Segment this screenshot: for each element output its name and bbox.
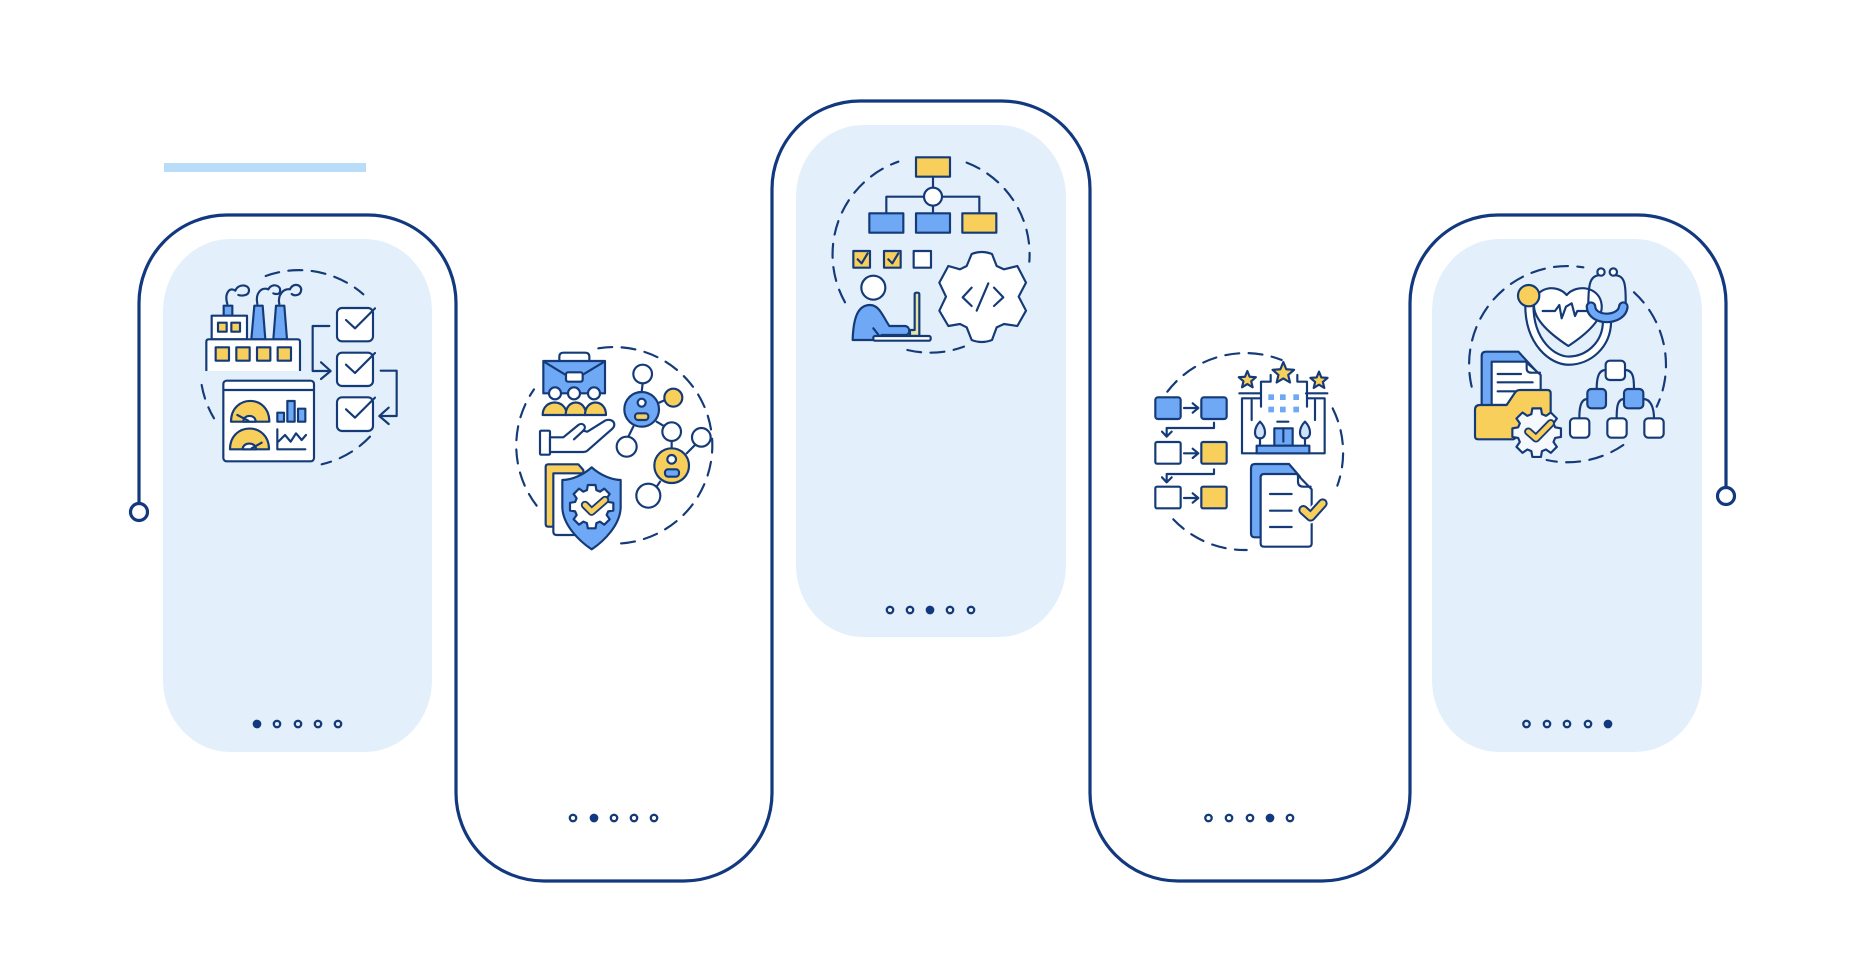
- card: panel 3 background: [796, 125, 1066, 637]
- icon: factory monitoring with checklist: [202, 270, 397, 464]
- end node right: [1718, 488, 1734, 504]
- connector outline snake: [139, 101, 1726, 881]
- pagination dots panel 2: [570, 815, 657, 821]
- pagination dots panel 4: [1205, 815, 1293, 821]
- icon: workflow, hotel and documents: [1155, 353, 1343, 550]
- pagination dots panel 5: [1523, 721, 1611, 727]
- title placeholder bar: [164, 163, 366, 172]
- icon: HR network and security shield: [516, 347, 712, 549]
- end node left: [130, 504, 148, 520]
- pagination dots panel 3: [887, 607, 974, 613]
- icon: health record, stethoscope and hierarchy: [1469, 266, 1666, 462]
- card: panel 1 background: [163, 239, 432, 752]
- pagination dots panel 1: [254, 721, 341, 727]
- icon: org chart, developer and code gear: [833, 157, 1030, 353]
- card: panel 5 background: [1432, 239, 1702, 752]
